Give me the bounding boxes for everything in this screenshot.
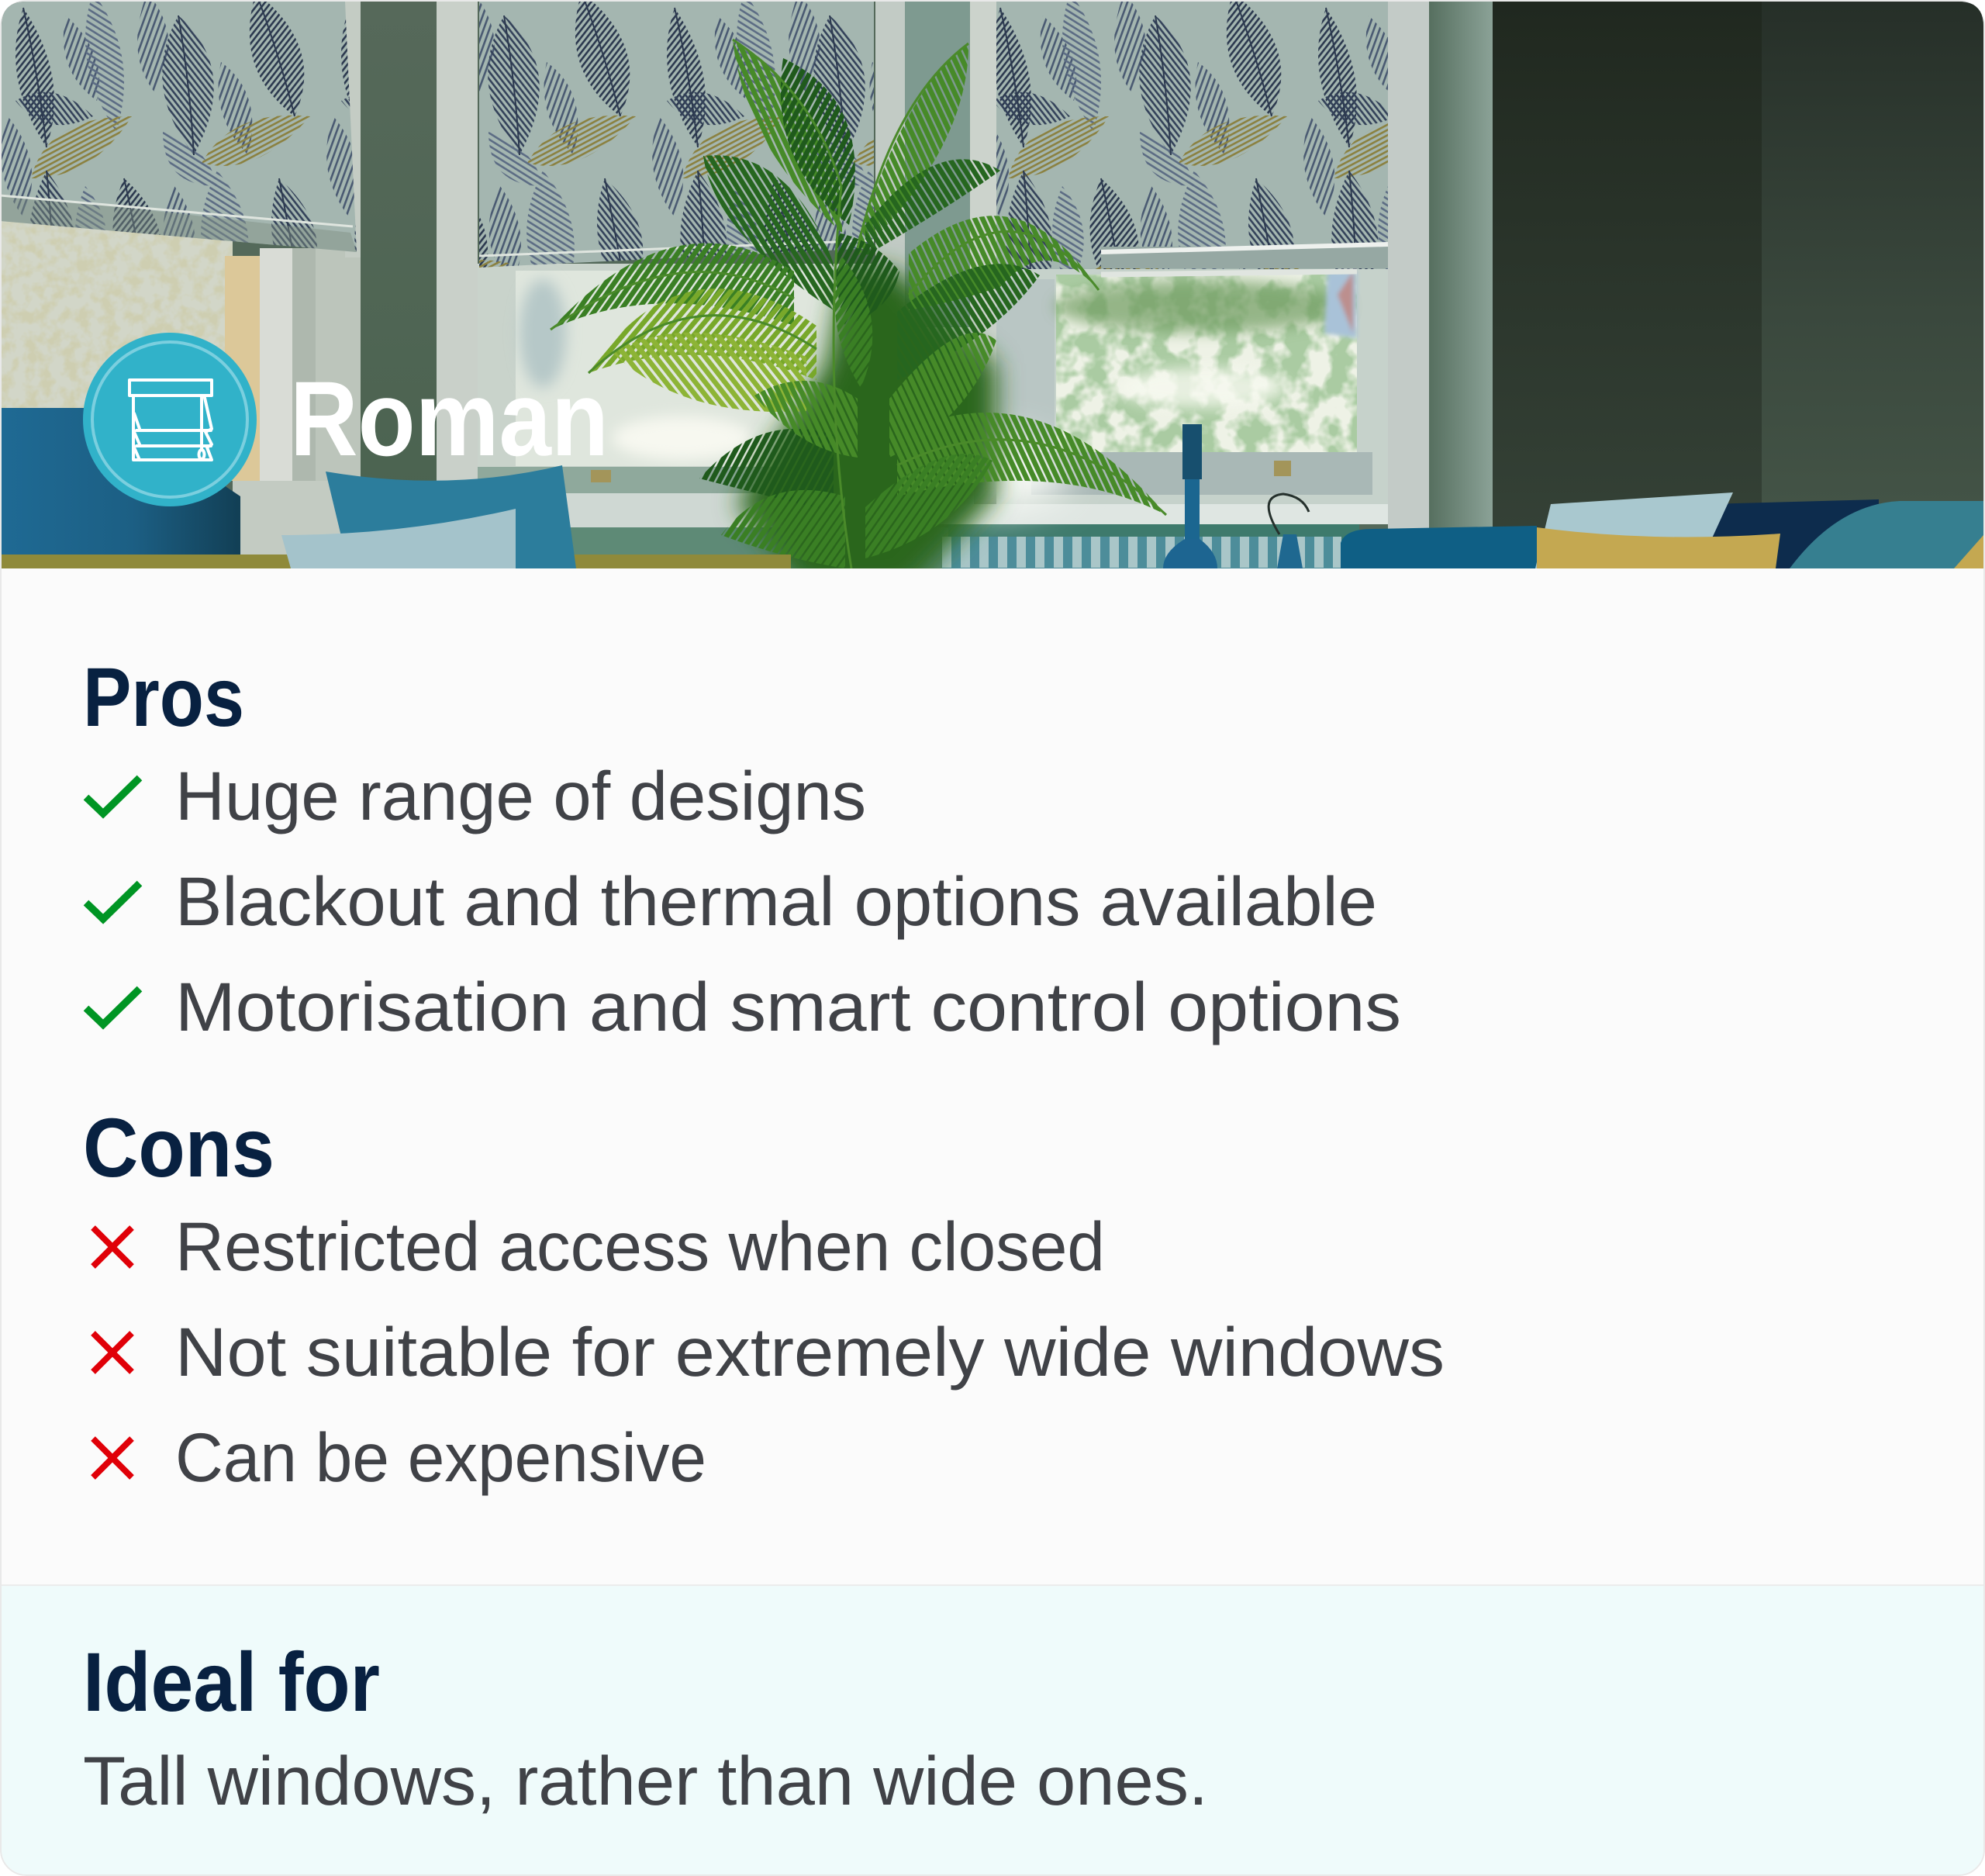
blinds icon badge: [83, 333, 257, 506]
palm plant: [551, 40, 1166, 589]
panel: ideal for: [2, 1584, 1983, 1876]
text: pro 3: Motorisation and smart control options: [175, 968, 1401, 1045]
icon: cross: [93, 1439, 132, 1477]
green pillar centre: [903, 2, 972, 327]
text: con 1: Restricted access when closed: [175, 1207, 1105, 1285]
icon: check: [86, 883, 140, 919]
hero photo: room with roman blinds: [0, 0, 1985, 589]
text: pro 2: Blackout and thermal options available: [175, 862, 1377, 940]
table lamp shade: [0, 408, 240, 560]
left cushions: [0, 465, 791, 568]
blind: left: [0, 2, 357, 252]
icon: check: [86, 778, 140, 814]
white column centre: [875, 2, 996, 467]
text: con 2: Not suitable for extremely wide windows: [175, 1313, 1445, 1391]
right window: [899, 2, 1493, 568]
icon: cross: [93, 1333, 132, 1372]
dark green pillar left: [361, 2, 437, 513]
con items: [93, 1207, 1445, 1496]
text: con 3: Can be expensive: [175, 1418, 706, 1496]
candlestick and vases: [1163, 424, 1309, 568]
pros section: [83, 650, 1401, 1045]
heading: Cons: Cons: [83, 1100, 274, 1194]
blind: right: [996, 2, 1388, 275]
text: pro 1: Huge range of designs: [175, 757, 866, 834]
heading: Ideal for: Ideal for: [83, 1635, 380, 1729]
cons section: [83, 1100, 1445, 1496]
title: Roman: Roman: [290, 360, 609, 479]
left window exterior: [0, 2, 364, 568]
icon: cross: [93, 1228, 132, 1266]
pro items: [86, 757, 1401, 1045]
window latches: [591, 461, 1291, 482]
radiator: [942, 537, 1341, 568]
blind: middle: [479, 2, 874, 268]
icon: check: [86, 989, 140, 1024]
middle window: [437, 264, 974, 568]
text: ideal for description: Tall windows, rather than wide ones.: [83, 1742, 1208, 1819]
dark wall right: [1493, 2, 1985, 568]
heading: Pros: Pros: [83, 650, 244, 744]
sofa with cushions: [1341, 492, 1983, 568]
white window column: [437, 2, 478, 513]
